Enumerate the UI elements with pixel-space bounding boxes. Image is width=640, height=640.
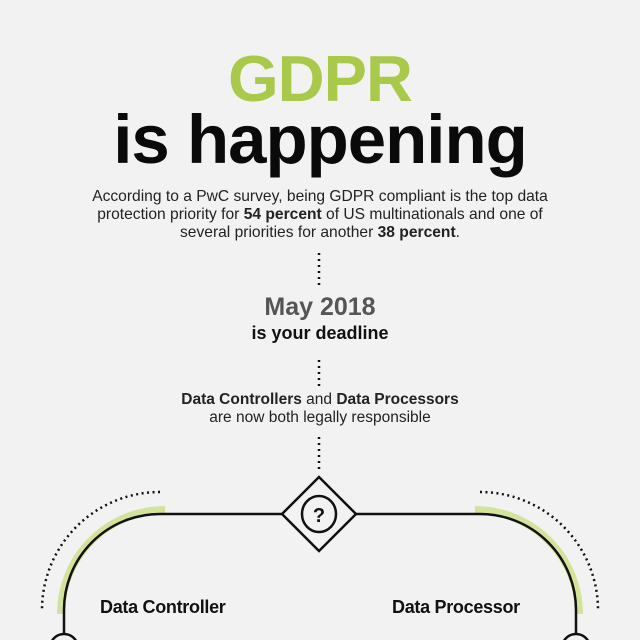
heading: Data Processor: Data Processor xyxy=(392,597,520,617)
deadline date: May 2018 xyxy=(264,293,376,321)
intro text: protection priority for 54 percent of US multinationals and one of xyxy=(97,206,543,223)
deadline subtitle: is your deadline xyxy=(251,323,389,343)
right branch xyxy=(355,492,598,640)
responsibility text: Data Controllers and Data Processors xyxy=(181,391,459,408)
icon: question diamond xyxy=(282,477,356,551)
title: is happening: is happening xyxy=(113,101,527,178)
icon: question diamond: ? xyxy=(313,505,325,527)
intro text xyxy=(92,188,548,241)
heading: Data Controller: Data Controller xyxy=(100,597,226,617)
responsibility text xyxy=(181,391,459,426)
responsibility text: are now both legally responsible xyxy=(209,409,431,426)
title: GDPR: GDPR xyxy=(228,42,412,115)
left branch xyxy=(42,492,283,640)
intro text: According to a PwC survey, being GDPR compliant is the top data xyxy=(92,188,548,205)
intro text: several priorities for another 38 percent. xyxy=(180,224,460,241)
